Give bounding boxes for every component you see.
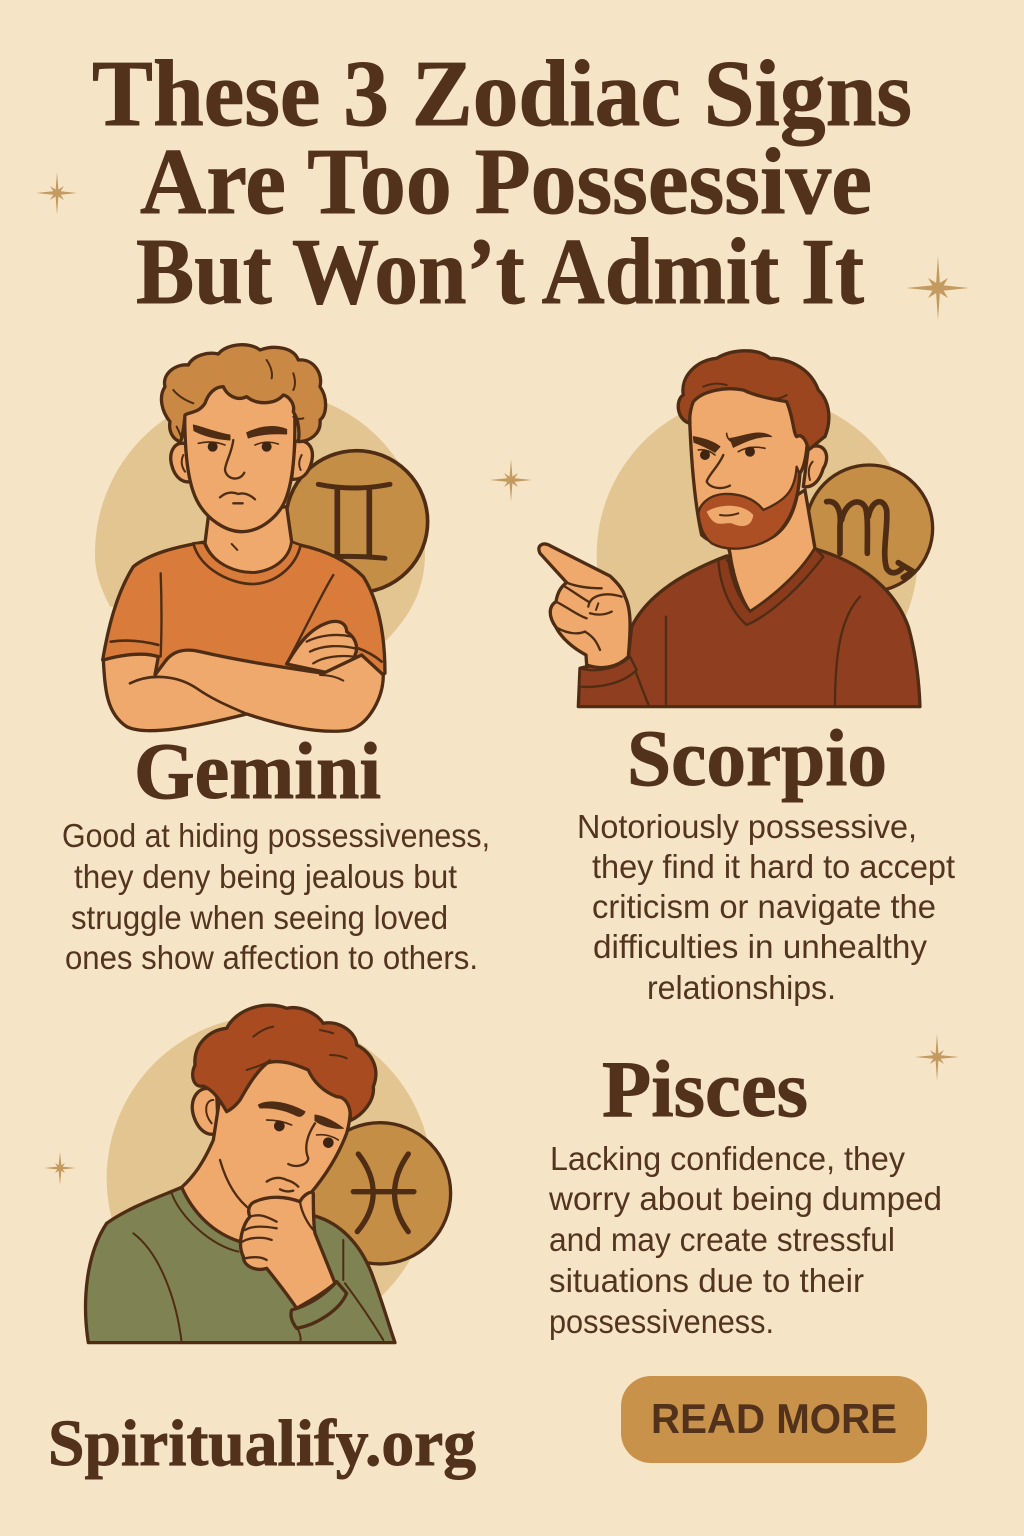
illustration: Gemini man with crossed arms xyxy=(95,345,428,731)
neck xyxy=(205,507,292,573)
sweater xyxy=(578,549,920,707)
read more button xyxy=(621,1376,927,1463)
Scorpio heading: Scorpio xyxy=(627,715,887,803)
Gemini sign medallion xyxy=(286,451,428,593)
neck and face xyxy=(182,1040,350,1242)
beard xyxy=(698,467,799,549)
Scorpio description: criticism or navigate the xyxy=(592,888,936,925)
sweater xyxy=(86,1187,395,1343)
Scorpio sign medallion xyxy=(806,465,933,592)
shirt xyxy=(103,542,385,690)
Scorpio description: they find it hard to accept xyxy=(592,848,955,885)
hair xyxy=(161,345,326,442)
hair xyxy=(678,351,829,450)
face xyxy=(688,380,808,547)
Scorpio description: Notoriously possessive, xyxy=(577,808,917,845)
nose xyxy=(707,455,730,488)
Gemini description: they deny being jealous but xyxy=(74,858,457,895)
brows and eyes xyxy=(258,1102,305,1116)
face xyxy=(185,373,295,532)
Pisces description xyxy=(548,1140,942,1340)
cuff xyxy=(291,1282,347,1328)
Scorpio description: difficulties in unhealthy xyxy=(593,928,928,965)
Scorpio description xyxy=(577,808,955,1006)
neck xyxy=(727,490,815,612)
ears xyxy=(171,443,192,482)
hand on chin xyxy=(240,1192,335,1308)
nose and mouth xyxy=(225,440,244,479)
decorative sparkles xyxy=(36,172,969,1185)
brows and eyes xyxy=(693,437,720,452)
title: But Won’t Admit It xyxy=(136,220,864,324)
Gemini description: ones show affection to others. xyxy=(65,939,478,976)
hair xyxy=(193,1005,376,1121)
Pisces description: situations due to their xyxy=(549,1262,864,1299)
Pisces heading: Pisces xyxy=(602,1046,808,1134)
title: These 3 Zodiac Signs xyxy=(92,42,912,146)
crossed arms xyxy=(103,621,383,731)
brows and eyes xyxy=(193,425,230,440)
Gemini description: struggle when seeing loved xyxy=(71,899,448,936)
Pisces description: possessiveness. xyxy=(549,1303,774,1340)
Gemini description xyxy=(62,817,490,976)
illustration: Scorpio man pointing xyxy=(539,351,933,716)
backdrop circle xyxy=(596,412,917,623)
cuff xyxy=(579,657,637,687)
backdrop circle xyxy=(95,390,425,642)
pointing hand xyxy=(539,544,630,668)
read more button: READ MORE xyxy=(651,1395,897,1442)
Scorpio description: relationships. xyxy=(647,969,836,1006)
illustration: Pisces man thinking xyxy=(86,1005,451,1343)
Gemini heading: Gemini xyxy=(134,728,381,816)
Pisces description: and may create stressful xyxy=(549,1221,895,1258)
title xyxy=(92,42,912,324)
ear xyxy=(192,1088,218,1134)
Pisces description: Lacking confidence, they xyxy=(550,1140,905,1177)
Pisces description: worry about being dumped xyxy=(548,1180,942,1217)
brand name: Spiritualify.org xyxy=(48,1407,476,1480)
Pisces sign medallion xyxy=(309,1123,451,1264)
title: Are Too Possessive xyxy=(140,130,872,234)
nose and mouth xyxy=(288,1123,315,1166)
ear xyxy=(803,446,827,487)
Gemini description: Good at hiding possessiveness, xyxy=(62,817,490,854)
backdrop circle xyxy=(107,1016,432,1341)
